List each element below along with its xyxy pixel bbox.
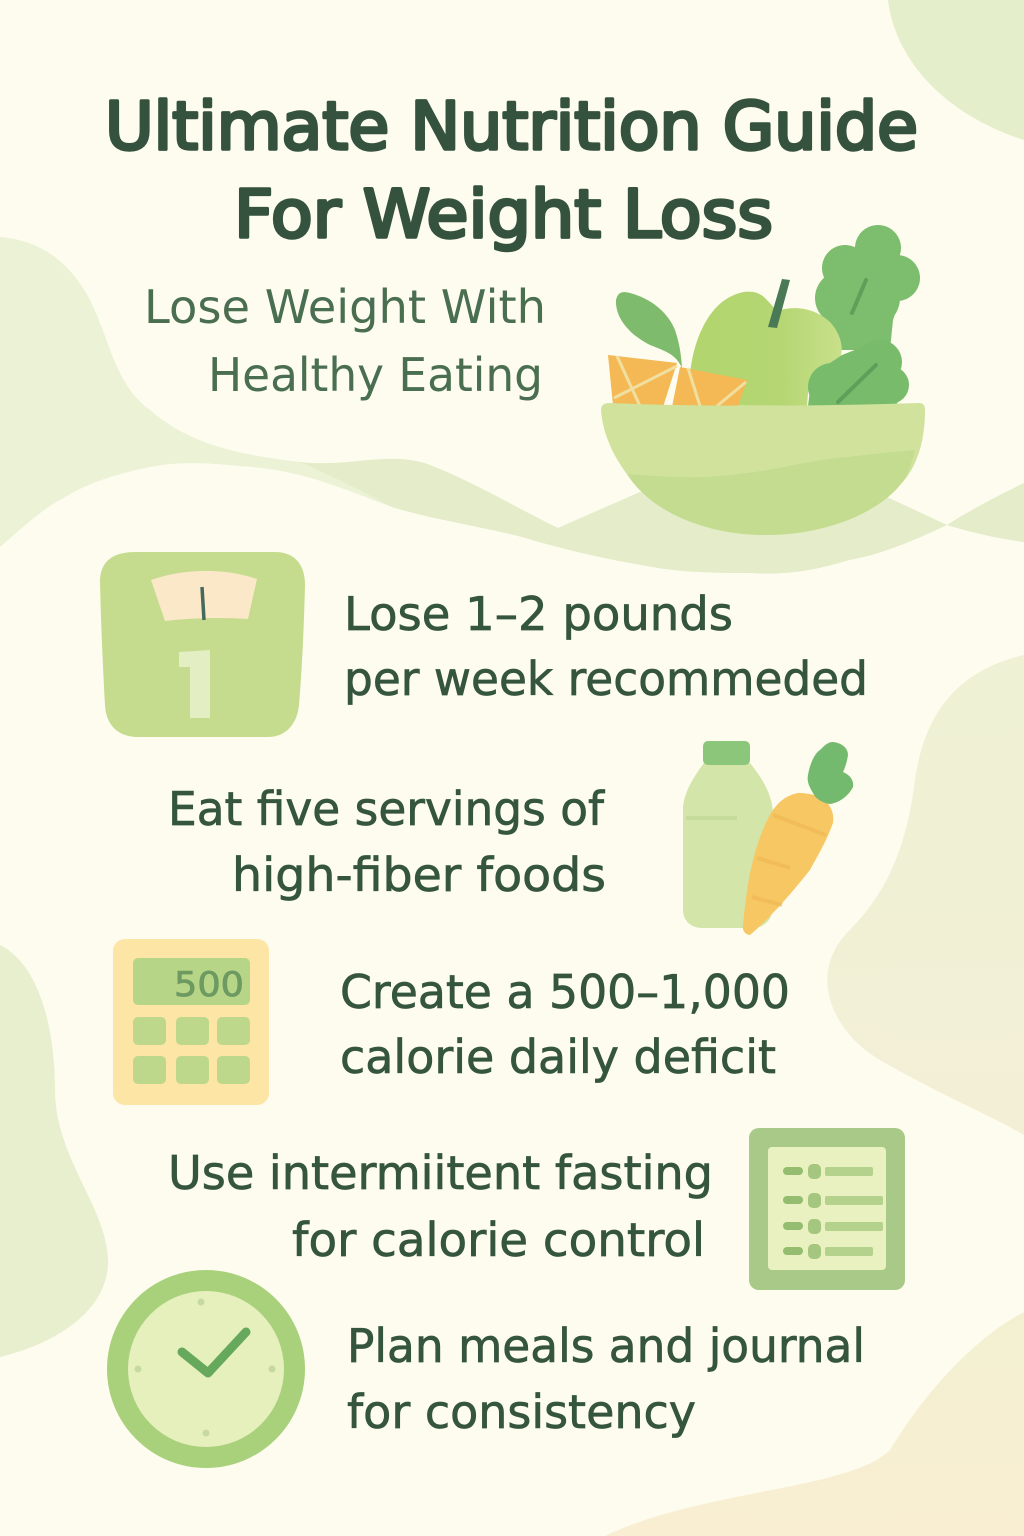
text [340, 965, 790, 1084]
item 2: fiber [168, 741, 853, 935]
text: Create a 500–1,000 [340, 965, 790, 1019]
text [347, 1319, 865, 1439]
icon: salad bowl [601, 225, 925, 535]
text [168, 782, 606, 902]
icon: scale [100, 552, 305, 737]
icon: bottle and carrot [683, 741, 853, 935]
title [105, 88, 918, 253]
item 4: fasting [168, 1128, 905, 1290]
text [344, 587, 868, 706]
icon: calculator: 500 [174, 965, 244, 1005]
icon: checklist [749, 1128, 905, 1290]
subtitle [144, 280, 546, 402]
item 3: deficit [113, 939, 790, 1105]
text: calorie daily deficit [340, 1030, 776, 1084]
text [168, 1146, 713, 1267]
title: For Weight Loss [234, 176, 773, 253]
text: Eat five servings of [168, 782, 606, 836]
text: high-fiber foods [232, 848, 606, 902]
text: Plan meals and journal [347, 1319, 865, 1373]
text: Use intermiitent fasting [168, 1146, 713, 1200]
subtitle: Lose Weight With [144, 280, 546, 334]
icon: calculator [113, 939, 269, 1105]
title: Ultimate Nutrition Guide [105, 88, 918, 165]
text: for calorie control [292, 1213, 705, 1267]
text: per week recommeded [344, 652, 868, 706]
icon: clock with check [107, 1270, 305, 1468]
item 1: weight [100, 552, 868, 737]
item 5: plan [107, 1270, 865, 1468]
subtitle: Healthy Eating [208, 348, 543, 402]
text: Lose 1–2 pounds [344, 587, 733, 641]
text: for consistency [347, 1385, 696, 1439]
